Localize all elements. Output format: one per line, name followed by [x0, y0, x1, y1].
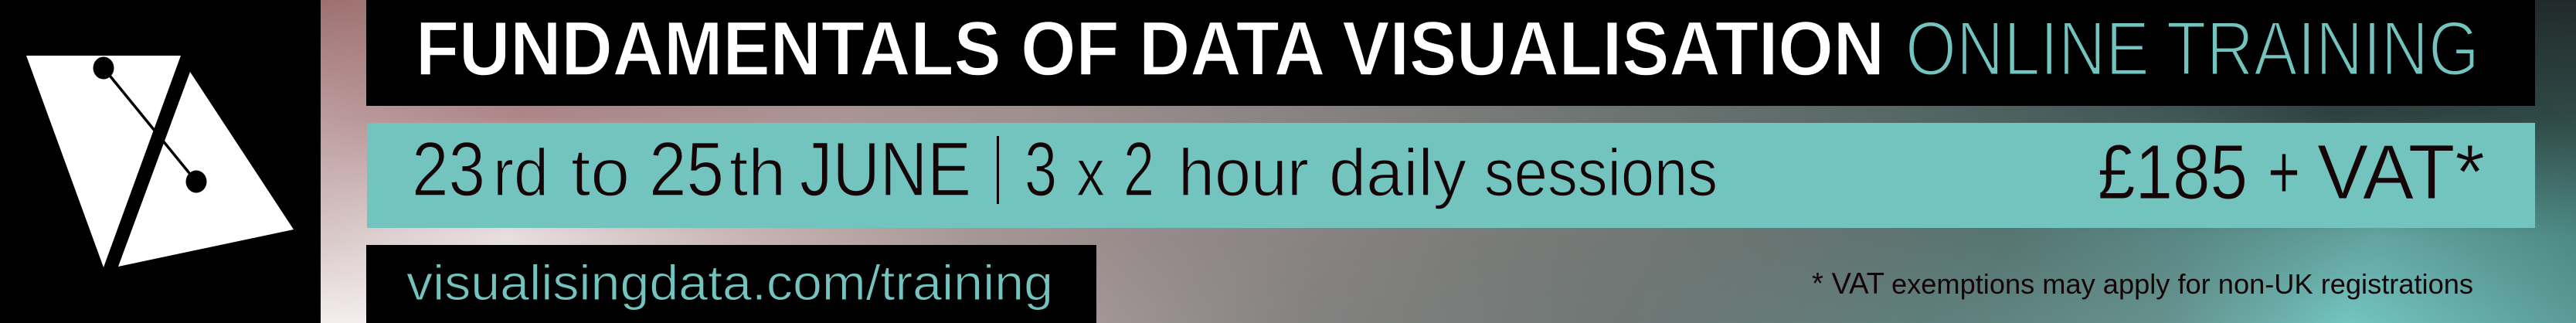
price: £185	[2098, 129, 2248, 216]
date text: 25	[649, 126, 724, 212]
panel: logo	[0, 0, 321, 323]
price: +	[2268, 129, 2300, 216]
panel: details band	[367, 123, 2535, 228]
date text: th	[729, 136, 786, 210]
date text	[412, 126, 971, 212]
sessions text: daily	[1329, 136, 1466, 210]
icon: visualising data logo	[26, 56, 294, 267]
footnote: * VAT	[1812, 267, 1884, 301]
panel: title band	[366, 0, 2535, 106]
sessions text: 3	[1025, 126, 1057, 212]
date text: to	[571, 136, 630, 210]
sessions text: 2	[1123, 126, 1154, 212]
date text: 23	[412, 126, 485, 212]
sessions text: sessions	[1484, 136, 1718, 210]
sessions text	[1025, 126, 1718, 212]
separator	[997, 136, 999, 204]
title: FUNDAMENTALS OF DATA VISUALISATION	[416, 5, 1884, 91]
subtitle: online training: ONLINE TRAINING	[1905, 5, 2479, 91]
panel: url band	[366, 245, 1096, 323]
price	[2098, 129, 2485, 216]
footnote: exemptions may apply for non-UK registrations	[1891, 268, 2473, 300]
price: VAT*	[2317, 129, 2485, 216]
date text: rd	[493, 136, 549, 210]
sessions text: x	[1076, 136, 1105, 210]
sessions text: hour	[1178, 136, 1309, 210]
url text: visualisingdata.com/training	[406, 255, 1053, 311]
date text: JUNE	[800, 126, 971, 212]
